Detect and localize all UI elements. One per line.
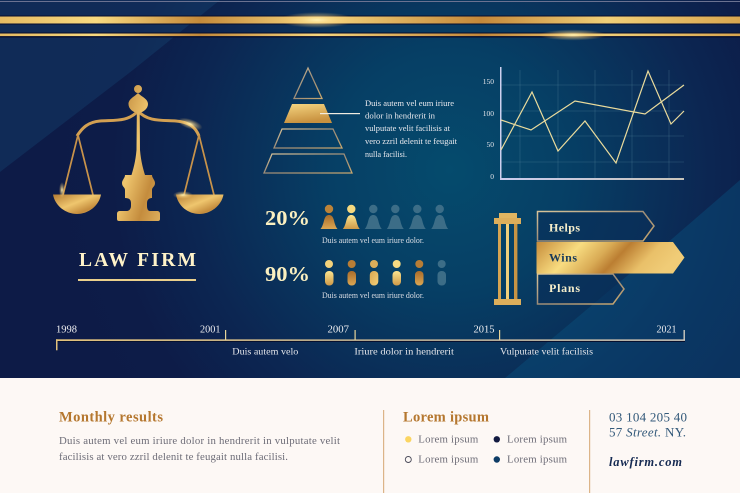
light diagonal facet bottom right (505, 180, 740, 378)
timeline captions: Duis autem velo (232, 348, 299, 358)
data series smooth (501, 85, 684, 130)
arrow: helps: Helps (549, 220, 580, 234)
arrow: plans: Plans (549, 281, 580, 295)
stat: 90 percent: Duis autem vel eum iriure dolor. (322, 291, 424, 300)
footer: contact (609, 410, 687, 469)
chart grid (501, 70, 684, 178)
person icons row one (320, 205, 448, 229)
stat: 90 percent (265, 260, 446, 300)
central column (117, 85, 160, 221)
chart y axis labels: 50 (486, 140, 494, 149)
top gold bands (0, 1, 740, 40)
person icons row two (325, 260, 446, 286)
timeline years: 2021 (656, 324, 676, 336)
legend item blue: Lorem ipsum (507, 454, 568, 466)
stat: 20 percent: Duis autem vel eum iriure dolor. (322, 236, 424, 245)
timeline years: 2015 (474, 324, 494, 336)
pyramid tier 4 (264, 154, 352, 173)
stat: 20 percent (265, 205, 448, 245)
timeline captions: Iriure dolor in hendrerit (354, 348, 454, 358)
right pan (176, 194, 224, 214)
icon: pillar (494, 213, 521, 305)
light diagonal facet top left (0, 0, 220, 172)
left pan (53, 194, 101, 214)
timeline years: 1998 (56, 324, 77, 336)
legend item navy: Lorem ipsum (507, 434, 568, 446)
timeline axis (56, 330, 685, 350)
footer: contact: 03 104 205 40 (609, 410, 687, 424)
sparkle glows (176, 115, 204, 133)
arrow: wins highlighted (536, 242, 684, 274)
line chart (483, 67, 684, 181)
title: law firm: LAW FIRM (79, 250, 196, 271)
pyramid chart (264, 68, 360, 173)
pyramid description: vero zzril delenit te feugait (365, 136, 458, 146)
timeline captions (232, 346, 593, 358)
timeline captions: Vulputate velit facilisis (500, 346, 593, 358)
pyramid tier 1 (294, 68, 322, 98)
footer: monthly results (59, 410, 340, 463)
timeline years (56, 324, 676, 336)
timeline years: 2007 (328, 324, 349, 336)
stat: 90 percent: 90% (265, 262, 310, 286)
pyramid tier 3 (274, 129, 342, 148)
arrow: plans (538, 274, 624, 304)
ribbon arrows (536, 212, 684, 304)
pyramid description: Duis autem vel eum iriure (365, 98, 454, 108)
legend item yellow: Lorem ipsum (418, 434, 479, 446)
pyramid tier 2 highlighted (284, 104, 332, 123)
dark blue background (0, 0, 740, 378)
legend item outline: Lorem ipsum (418, 454, 479, 466)
arrow: helps (538, 212, 654, 241)
pyramid description: vulputate velit facilisis at (365, 123, 451, 133)
footer: contact: lawfirm.com (609, 455, 682, 469)
stat: 20 percent: 20% (265, 206, 310, 230)
footer: monthly results: Monthly results (59, 410, 163, 426)
chart axes (500, 67, 502, 180)
title: law firm (78, 250, 196, 281)
pyramid description: nulla facilisi. (365, 149, 407, 159)
chart y axis labels: 0 (490, 172, 494, 181)
footer: legend (403, 410, 568, 466)
footer: contact: 57 Street. NY. (609, 424, 686, 440)
timeline (56, 324, 685, 358)
pyramid callout line (320, 113, 360, 114)
chart y axis labels (483, 77, 494, 181)
footer panel (0, 378, 740, 493)
left chains (63, 135, 93, 195)
icon: scales of justice (53, 85, 224, 221)
chart y axis labels: 100 (483, 109, 494, 118)
scale beam (77, 111, 199, 136)
pyramid description: dolor in hendrerit in (365, 110, 436, 120)
pyramid description (365, 98, 458, 159)
data series spiky (501, 71, 684, 163)
chart y axis labels: 150 (483, 77, 494, 86)
right chains (184, 135, 214, 195)
timeline years: 2001 (200, 324, 220, 336)
footer: monthly results: Duis autem vel eum iriure dolor in hendrerit in vulputate velit (59, 435, 340, 447)
footer: legend: Lorem ipsum (403, 410, 489, 426)
footer: monthly results: facilisis at vero zzril delenit te feugait nulla facilisi. (59, 451, 288, 463)
arrow: wins highlighted: Wins (549, 250, 577, 264)
